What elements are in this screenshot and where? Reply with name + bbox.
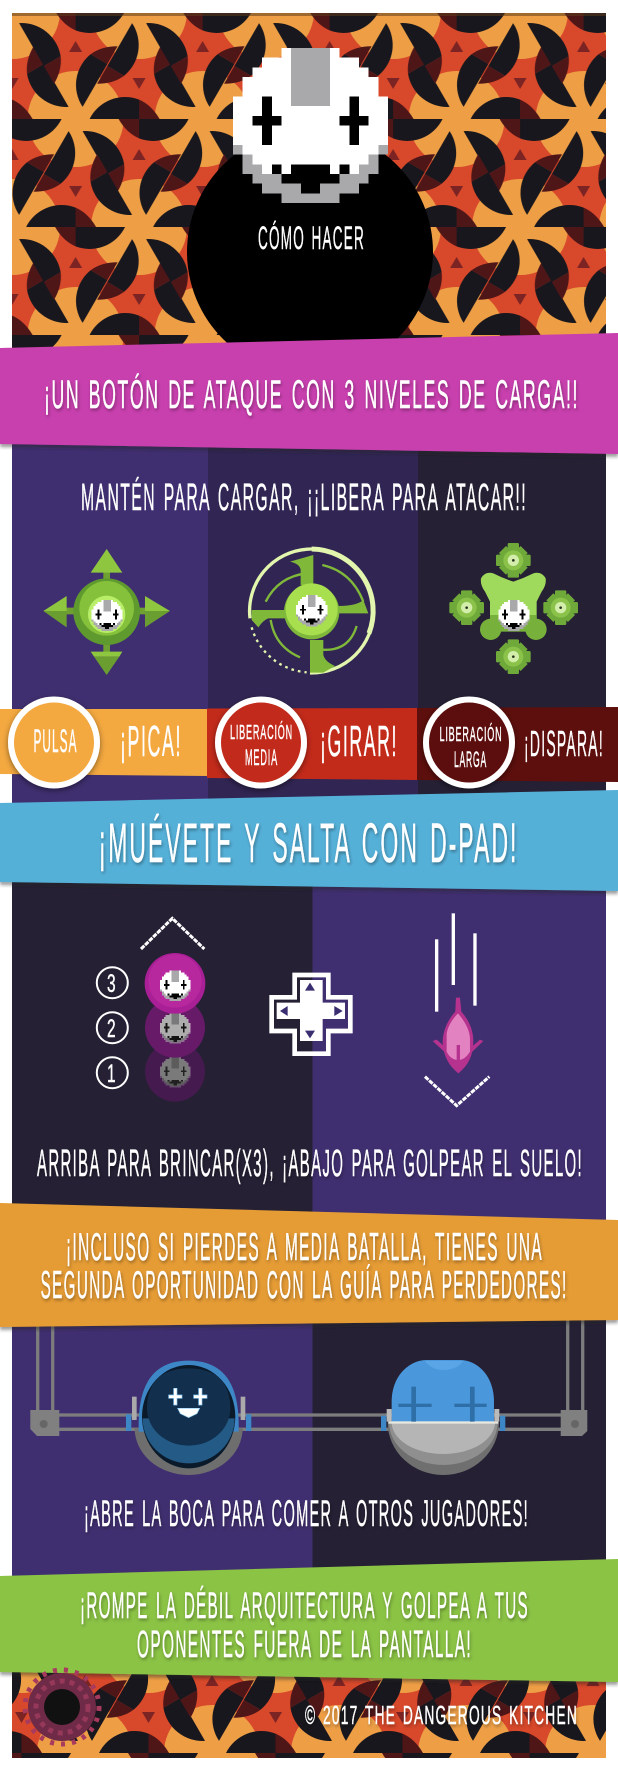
action strip: dark red long release: LARGA [454,747,487,772]
robot: closed mouth [381,1360,505,1475]
rail corner connectors [30,1410,587,1436]
jump counters: 1 [107,1060,117,1088]
panel: eat players columns [12,1320,606,1585]
bottom pattern background [12,1665,606,1758]
jump counters [97,967,128,1088]
action strip: dark red long release: LIBERACIÓN [440,723,502,746]
rails: breakable architecture [38,1320,583,1429]
action strip: orange press: PULSA [34,723,78,759]
robot: open mouth [126,1361,251,1475]
text: CÓMO HACER [258,220,365,256]
icon: dark spiked orb [25,1670,99,1744]
icon: spin attack [250,549,374,673]
panel: charge attack columns [12,440,606,810]
icon: d-pad [272,975,350,1054]
panel: movement columns [12,880,606,1225]
action strip: dark red long release [417,700,618,786]
icon: poke attack [43,549,170,675]
band: pink heading [0,333,618,454]
icon: ground pound [425,913,489,1106]
action strip: red medium release: ¡GIRAR! [320,717,398,766]
action strip: orange press: ¡PICA! [120,717,182,766]
action strip: orange press [0,700,207,786]
action strip: red medium release [207,700,417,786]
band: blue heading [0,790,618,891]
icon: triple jump [141,918,205,1102]
jump counters: 3 [107,970,117,998]
action strip: red medium release: LIBERACIÓN [230,721,293,744]
band: orange second chance [0,1203,618,1327]
band: green break architecture [0,1559,618,1682]
top pattern background [12,13,606,358]
mascot: black body with pixel head [187,48,433,375]
icon: shoot attack [449,543,578,674]
action strip: red medium release: MEDIA [245,745,278,770]
jump counters: 2 [107,1015,117,1043]
